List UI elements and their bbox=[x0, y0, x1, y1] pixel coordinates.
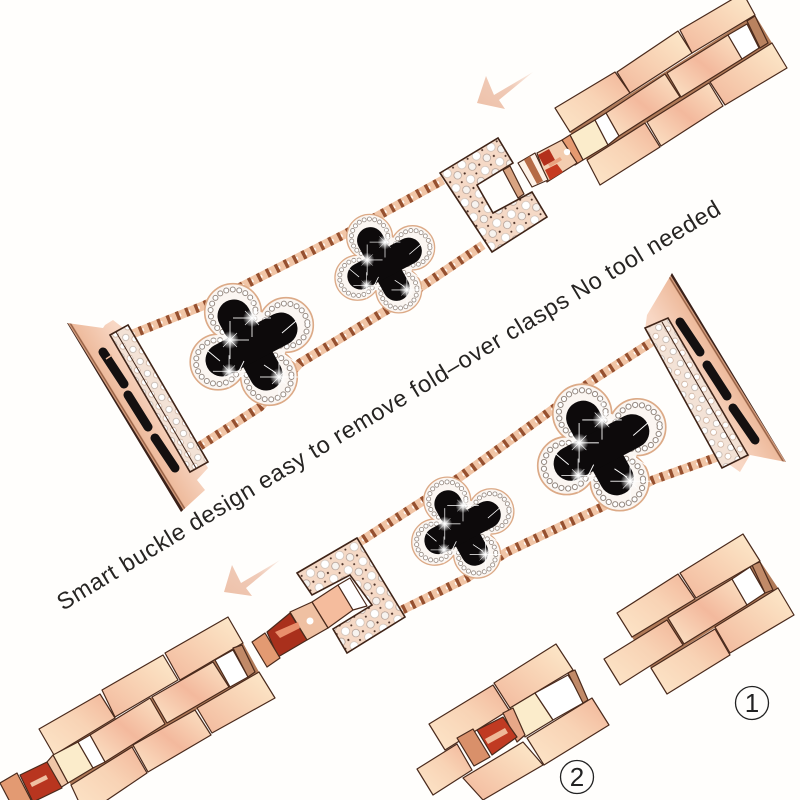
lower band: rhinestone buckle bbox=[297, 538, 405, 653]
lower band: watch lug adapter bbox=[645, 273, 786, 472]
lower band: rhinestone connector bar bbox=[645, 318, 748, 468]
caption text: Smart buckle design easy to remove fold–over clasps No tool needed bbox=[52, 195, 725, 615]
step number 2 bbox=[560, 760, 594, 794]
lower band: small clover charm bbox=[412, 477, 514, 578]
upper band: large clover charm bbox=[190, 284, 313, 405]
arrow: upper, pointing left bbox=[477, 72, 533, 109]
lower band: end clasp bbox=[0, 755, 68, 800]
detached link set 1 bbox=[604, 534, 794, 694]
lower band: large clover charm bbox=[538, 385, 665, 510]
upper band: box chains bbox=[130, 180, 483, 446]
upper band: small clover charm bbox=[335, 215, 434, 313]
upper band: rhinestone connector bar bbox=[110, 325, 208, 472]
step number 2: 2 bbox=[570, 762, 584, 792]
step number 1 bbox=[736, 686, 768, 720]
lower band: metal links bbox=[39, 617, 275, 800]
detached link set 2 with clasp bbox=[417, 644, 609, 800]
arrow: lower, pointing left bbox=[224, 560, 280, 596]
lower band: fold-over clasp bbox=[252, 602, 328, 667]
lower band: box chains bbox=[355, 340, 720, 612]
upper band: metal links bbox=[555, 0, 787, 185]
upper band: rhinestone buckle bbox=[440, 138, 547, 252]
upper band: watch lug adapter bbox=[67, 320, 208, 512]
step number 1: 1 bbox=[745, 688, 759, 718]
upper band: fold-over clasp bbox=[518, 135, 583, 187]
